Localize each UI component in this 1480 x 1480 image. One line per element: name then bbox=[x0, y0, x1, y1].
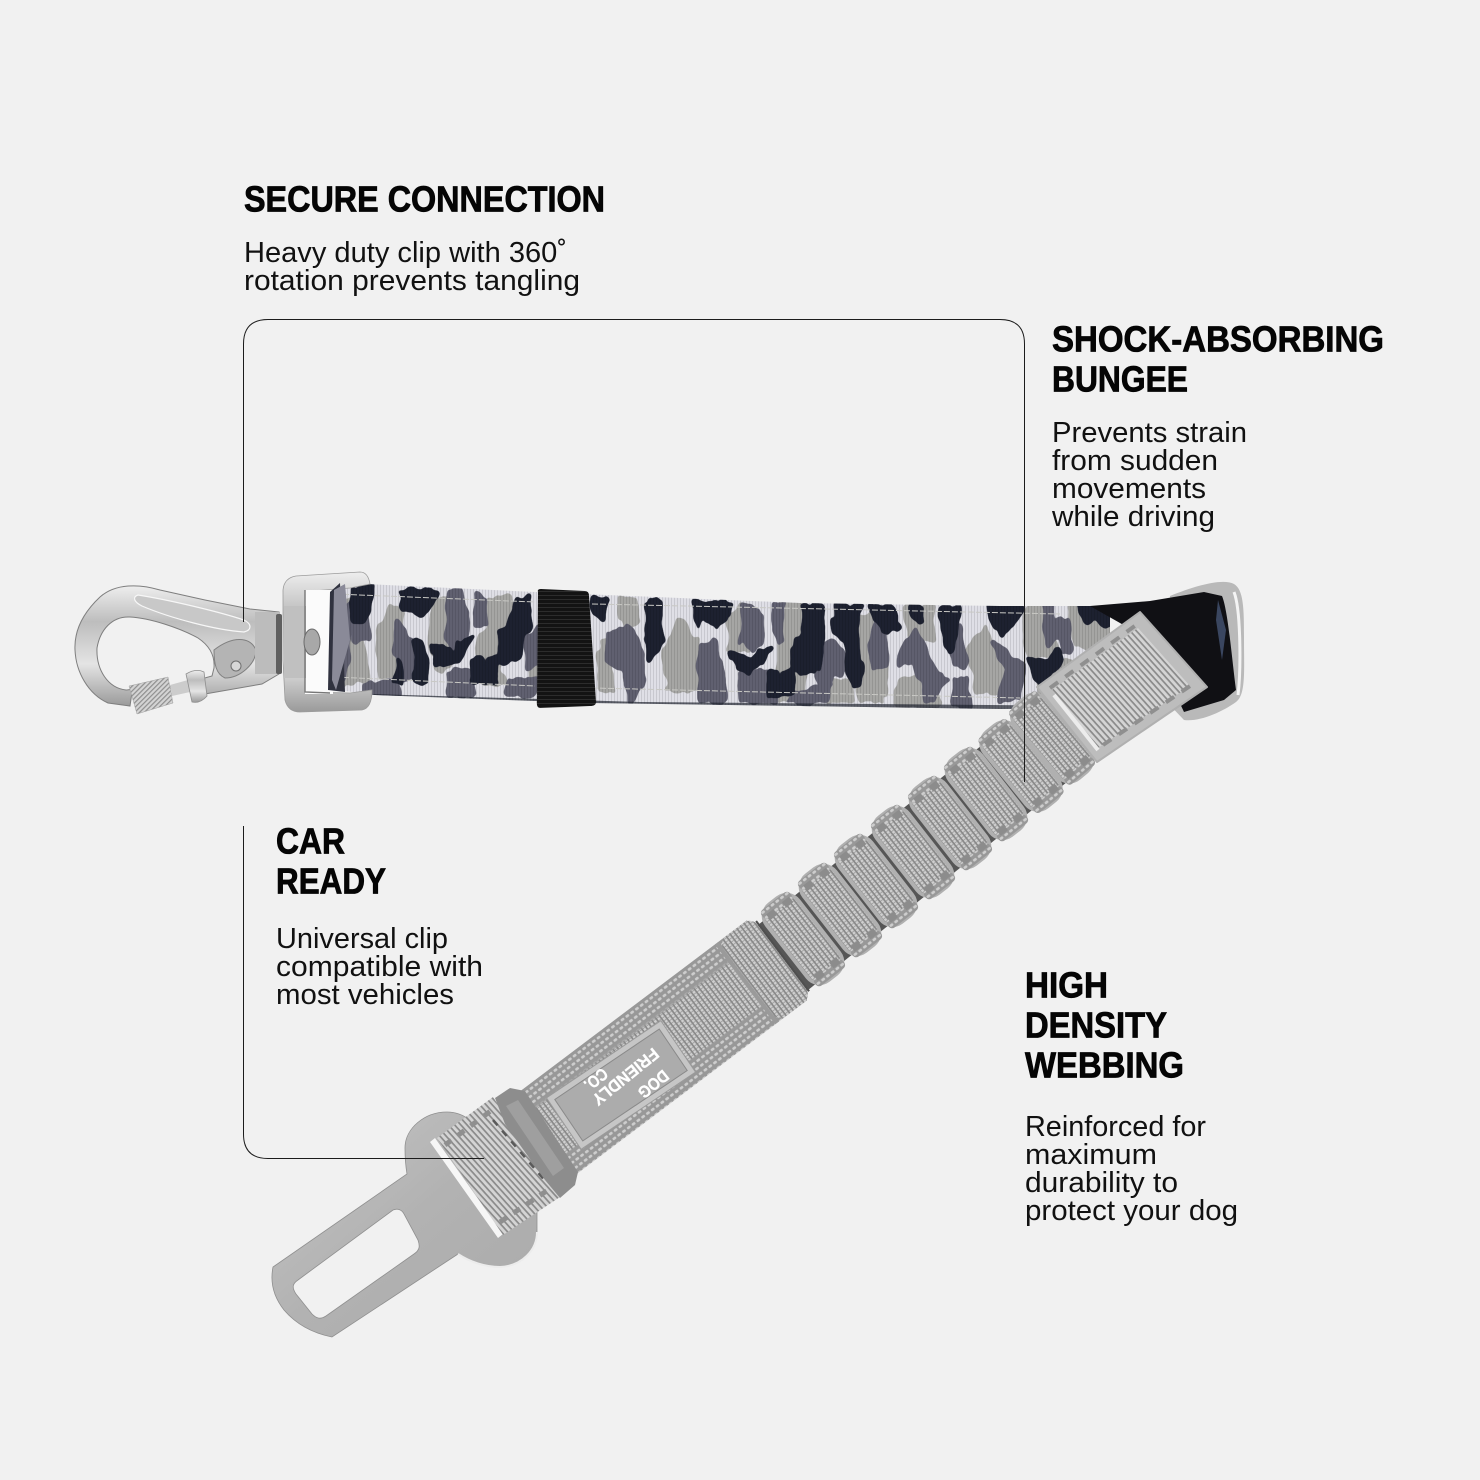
callout: shock-absorbing bungee bbox=[1051, 318, 1384, 533]
body: car ready bbox=[276, 923, 483, 1011]
callout: high density webbing bbox=[1025, 964, 1238, 1227]
body: high density webbing: protect your dog bbox=[1025, 1195, 1238, 1227]
heading: car ready bbox=[276, 820, 386, 902]
leader line: car ready bbox=[244, 826, 484, 1158]
brand patch text: FRIENDLY bbox=[588, 1044, 662, 1109]
heading: shock-absorbing bungee: BUNGEE bbox=[1052, 358, 1188, 400]
camouflage strap bbox=[344, 584, 1110, 709]
knurled locking barrel bbox=[129, 677, 173, 714]
heading: high density webbing bbox=[1025, 964, 1184, 1086]
body: secure connection bbox=[244, 237, 580, 297]
brand patch bbox=[546, 1021, 696, 1149]
heading: shock-absorbing bungee: SHOCK-ABSORBING bbox=[1052, 318, 1384, 360]
buckle webbing tab with stitching bbox=[437, 1088, 578, 1235]
body: car ready: most vehicles bbox=[276, 979, 454, 1011]
heading: high density webbing: WEBBING bbox=[1025, 1044, 1184, 1086]
d-ring swivel bbox=[283, 572, 372, 712]
heading: shock-absorbing bungee bbox=[1052, 318, 1384, 400]
body: shock-absorbing bungee: while driving bbox=[1051, 501, 1215, 533]
body: shock-absorbing bungee: movements bbox=[1052, 473, 1206, 505]
body: shock-absorbing bungee bbox=[1051, 417, 1247, 533]
heading: secure connection: SECURE CONNECTION bbox=[244, 178, 605, 220]
heading: car ready: READY bbox=[276, 860, 386, 902]
high density webbing section bbox=[517, 916, 813, 1174]
black strap end with metal bar bbox=[1090, 582, 1244, 720]
snap hook clip bbox=[75, 586, 282, 714]
body: high density webbing bbox=[1025, 1111, 1238, 1227]
top webbing loop bbox=[1037, 612, 1207, 762]
seat belt buckle bbox=[272, 1112, 537, 1337]
body: high density webbing: maximum bbox=[1025, 1139, 1157, 1171]
body: shock-absorbing bungee: Prevents strain bbox=[1052, 417, 1247, 449]
buckle slot bbox=[430, 1138, 503, 1238]
body: high density webbing: durability to bbox=[1025, 1167, 1178, 1199]
heading: high density webbing: DENSITY bbox=[1025, 1004, 1167, 1046]
body: secure connection: Heavy duty clip with 360˚ bbox=[244, 237, 567, 269]
body: high density webbing: Reinforced for bbox=[1025, 1111, 1207, 1143]
leader line: secure connection and bungee bracket bbox=[244, 320, 1024, 782]
heading: high density webbing: HIGH bbox=[1025, 964, 1108, 1006]
black slider loop bbox=[537, 589, 596, 708]
brand patch text: CO. bbox=[580, 1064, 611, 1094]
body: car ready: compatible with bbox=[276, 951, 483, 983]
body: car ready: Universal clip bbox=[276, 923, 448, 955]
callout: secure connection bbox=[244, 178, 605, 297]
bungee pads bbox=[755, 686, 1101, 992]
grey bungee section bbox=[755, 612, 1207, 992]
stitching bbox=[335, 594, 1060, 698]
infographic canvas bbox=[74, 186, 1382, 1338]
heading: car ready: CAR bbox=[276, 820, 345, 862]
brand patch text: DOG bbox=[634, 1066, 672, 1102]
body: secure connection: rotation prevents tangling bbox=[244, 265, 580, 297]
product: seat belt leash bbox=[75, 572, 1244, 1337]
body: shock-absorbing bungee: from sudden bbox=[1052, 445, 1218, 477]
callout: car ready bbox=[276, 820, 483, 1011]
